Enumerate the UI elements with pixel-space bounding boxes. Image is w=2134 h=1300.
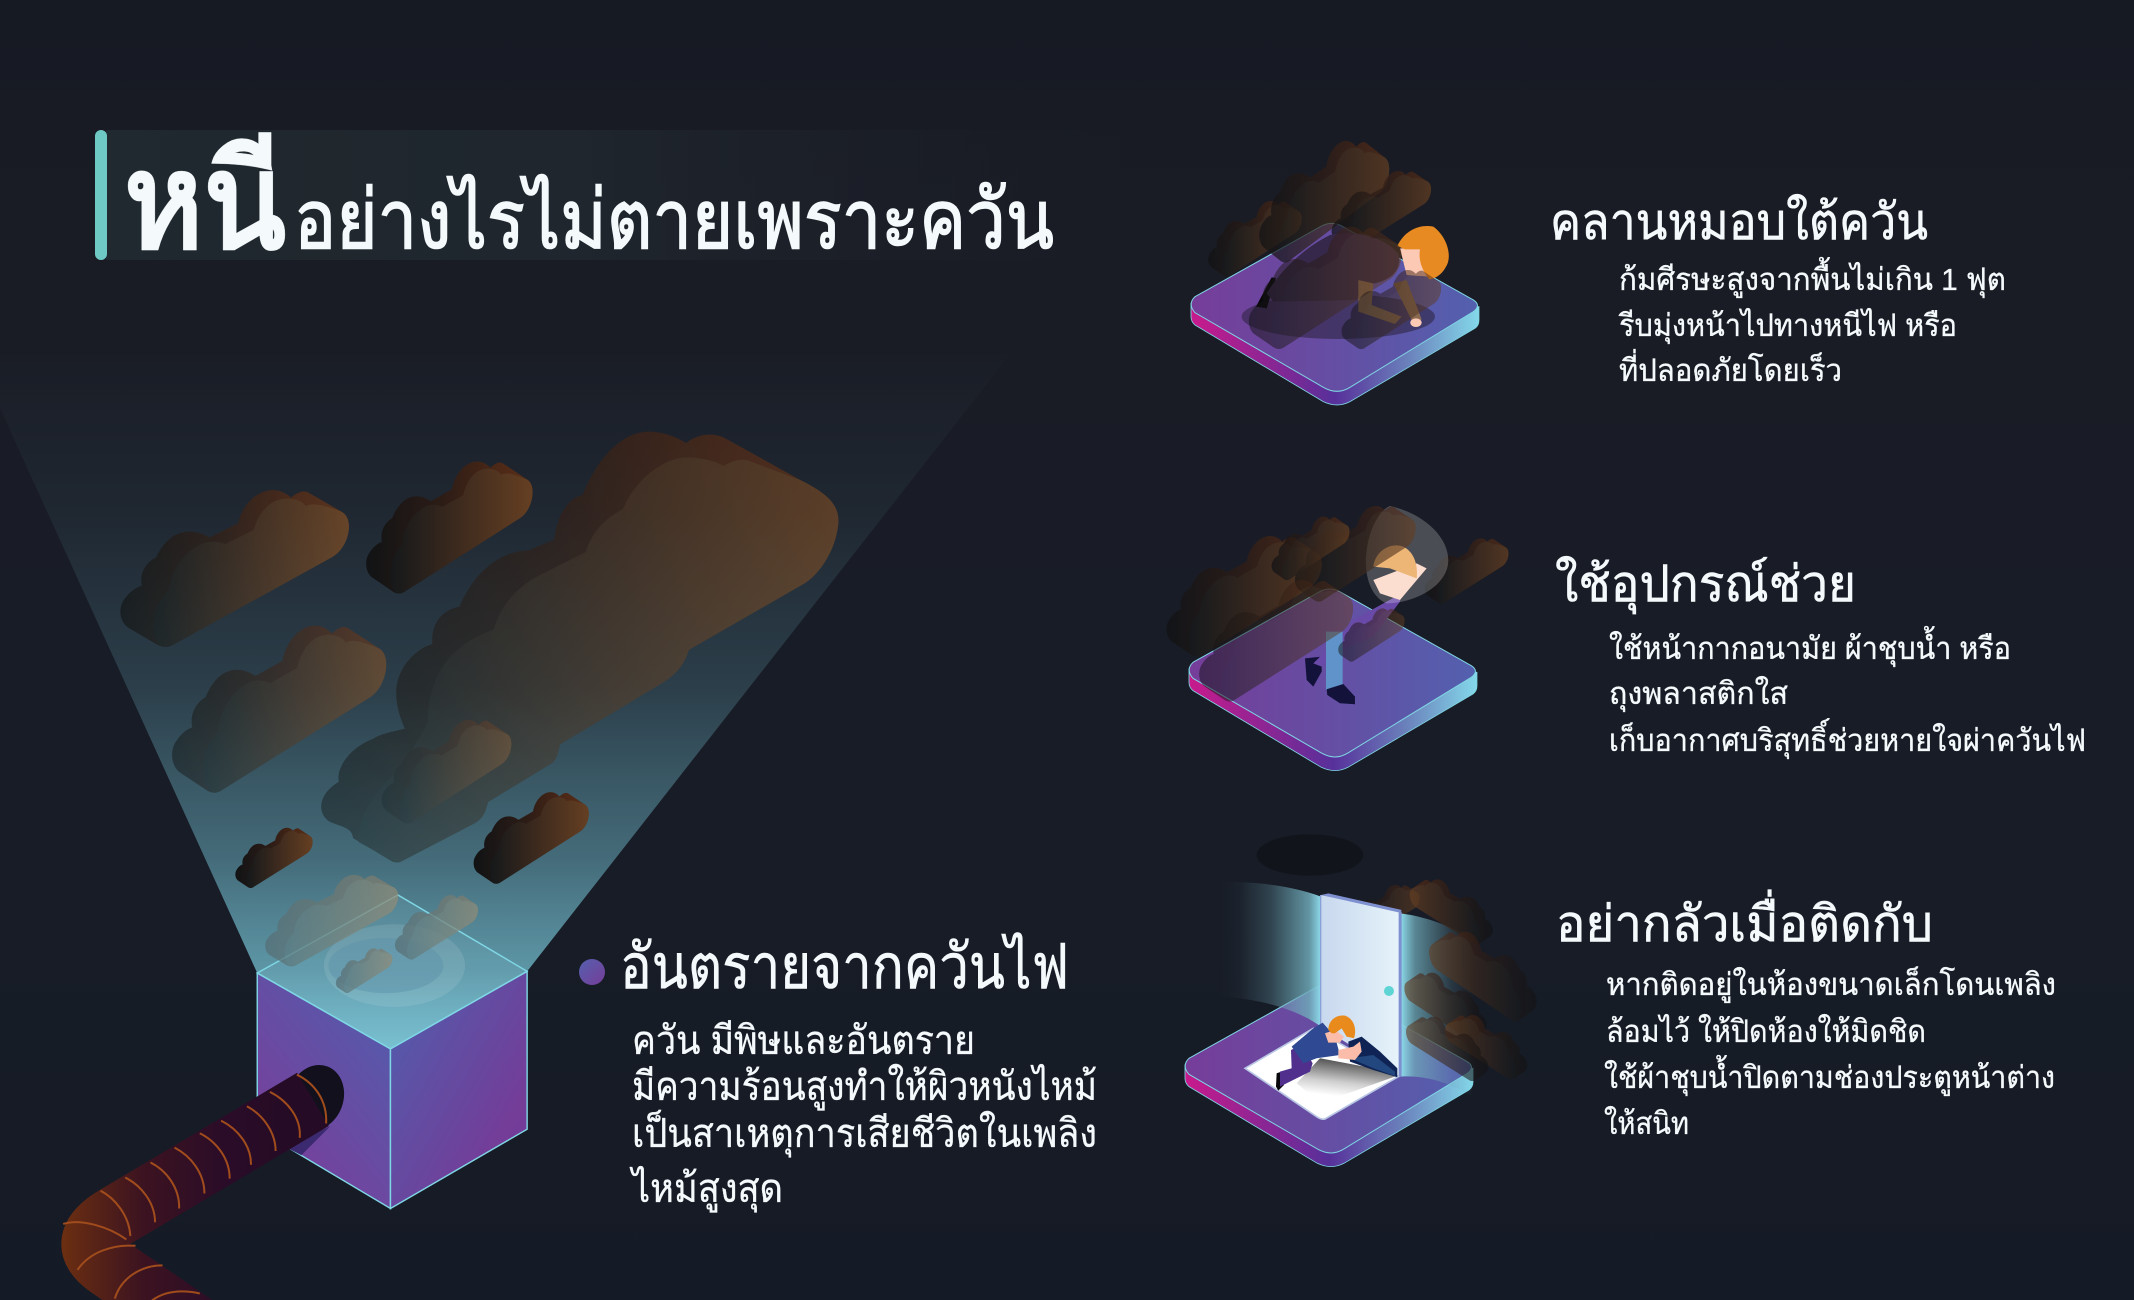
box (257, 895, 527, 1208)
panel 1 heading: คลานหมอบใต้ควัน (1550, 194, 1928, 250)
door (1320, 893, 1402, 1077)
crawling person (1256, 226, 1449, 327)
panel 3 illustration: person sheltering behind door (1185, 834, 1537, 1167)
panel 1 text: ก้มศีรษะสูงจากพื้นไม่เกิน 1 ฟุต (1619, 257, 2006, 299)
hazard text: มีความร้อนสูงทำให้ผิวหนังไหม้ (632, 1063, 1097, 1110)
light beam (0, 343, 1019, 1049)
title: หนี (124, 128, 286, 277)
hazard text (629, 1019, 1097, 1213)
hazard text: เป็นสาเหตุการเสียชีวิตในเพลิง (632, 1109, 1097, 1158)
light from door (1220, 882, 1473, 1097)
panel 2 illustration: person with mask bag (1167, 506, 1508, 771)
light beam overlay (0, 343, 1019, 1049)
title: อย่างไรไม่ตายเพราะควัน (294, 175, 1054, 266)
panel 3 text: ล้อมไว้ ให้ปิดห้องให้มิดชิด (1606, 1014, 1926, 1049)
hazard heading with bullet: อันตรายจากควันไฟ (620, 932, 1069, 1002)
panel 3 text: หากติดอยู่ในห้องขนาดเล็กโดนเพลิง (1606, 966, 2056, 1003)
title (95, 128, 1140, 277)
panel 3 heading: อย่ากลัวเมื่อติดกับ (1556, 890, 1933, 952)
translucent clouds over person (1249, 227, 1441, 349)
dark smoke clouds in front of light (235, 461, 589, 888)
hazard text: ไหม้สูงสุด (629, 1166, 783, 1213)
panel 1 text: ที่ปลอดภัยโดยเร็ว (1619, 349, 1842, 388)
panel 1 text: รีบมุ่งหน้าไปทางหนีไฟ หรือ (1618, 308, 1957, 345)
large merged cloud mass (321, 432, 838, 862)
faded clouds above box (265, 875, 478, 993)
floor mat (1245, 1028, 1398, 1119)
panel 2 text (1609, 626, 2086, 760)
panel 1 text (1618, 257, 2006, 388)
clouds beside door (1404, 879, 1537, 1081)
panel 2 text: ใช้หน้ากากอนามัย ผ้าชุบน้ำ หรือ (1609, 626, 2011, 668)
panel 3 text: ให้สนิท (1604, 1106, 1689, 1141)
panel 3 text: ใช้ผ้าชุบน้ำปิดตามช่องประตูหน้าต่าง (1604, 1055, 2055, 1097)
sheltering person (1276, 1015, 1397, 1091)
panel 3 text (1604, 966, 2056, 1141)
clouds behind person (1167, 536, 1508, 657)
panel 2 text: ถุงพลาสติกใส (1609, 676, 1788, 713)
panel 1 illustration: crawling person (1191, 141, 1479, 405)
smoke hazard illustration: light beam, clouds, box and pipe (0, 343, 1019, 1300)
hazard text: ควัน มีพิษและอันตราย (632, 1019, 975, 1063)
standing person (1305, 506, 1448, 704)
translucent clouds over person (1199, 506, 1416, 701)
clouds behind person (1208, 141, 1431, 276)
panel 2 text: เก็บอากาศบริสุทธิ์ช่วยหายใจผ่าควันไฟ (1609, 717, 2086, 760)
smoke clouds behind light (120, 432, 838, 862)
pipe (63, 1057, 353, 1300)
panel 2 heading: ใช้อุปกรณ์ช่วย (1555, 556, 1856, 614)
